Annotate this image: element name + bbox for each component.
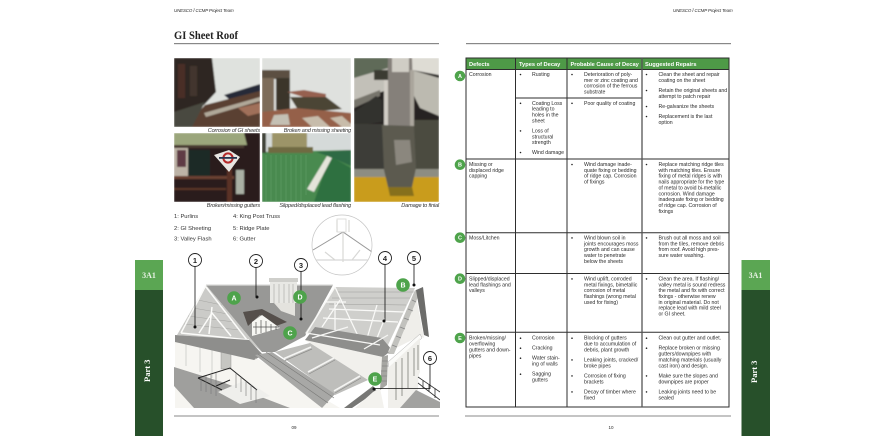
row C: moss/litchen: joints encourages moss bbox=[583, 241, 639, 247]
left side tab: Part 3 bbox=[142, 360, 152, 382]
legend: 5: Ridge Plate bbox=[233, 226, 269, 232]
row C: moss/litchen: Brush out all moss and soil bbox=[658, 235, 720, 241]
door bbox=[221, 352, 231, 369]
row D: slipped/displaced lead flashings: the metal and fix with correct bbox=[658, 288, 725, 294]
numbered callouts: 4 bbox=[383, 254, 388, 263]
table grid bbox=[466, 58, 729, 407]
marker: D: D bbox=[297, 294, 303, 302]
row D: slipped/displaced lead flashings: replace lead with mild steel bbox=[658, 306, 721, 312]
row D: slipped/displaced lead flashings bbox=[469, 276, 726, 318]
left page number: 09 bbox=[291, 425, 297, 430]
row E: broken gutters and downpipes: sealed bbox=[658, 395, 674, 401]
caption: slipped/displaced lead flashing: Slipped/displaced lead flashing bbox=[279, 203, 352, 209]
gable end wall bbox=[388, 300, 424, 397]
row B: missing or displaced ridge capping: corrosion. Wind damage bbox=[658, 191, 715, 197]
defects table bbox=[455, 58, 729, 407]
row D: slipped/displaced lead flashings: valleys bbox=[469, 288, 485, 294]
row D: slipped/displaced lead flashings: or GI sheet. bbox=[658, 312, 686, 318]
legend: 2: GI Sheeting bbox=[174, 226, 211, 232]
row marker: D: D bbox=[458, 277, 462, 283]
row B: missing or displaced ridge capping: inadequate fixing or bedding bbox=[658, 197, 724, 203]
photo: broken/missing gutters bbox=[174, 133, 260, 202]
photo: slipped/displaced lead flashing bbox=[262, 133, 351, 202]
legend: 3: Valley Flash bbox=[174, 236, 212, 242]
roof illustration bbox=[174, 264, 440, 408]
marker: D bbox=[293, 290, 307, 304]
row A: corrosion bbox=[469, 72, 727, 156]
right page header: UNESCO Î CCMP Project Team bbox=[673, 8, 733, 13]
row C: moss/litchen: water to penetrate bbox=[584, 253, 626, 259]
row E: broken gutters and downpipes: fixed bbox=[584, 395, 595, 401]
row E: broken gutters and downpipes: gutters/downpipes with bbox=[658, 352, 711, 358]
row C: moss/litchen: Moss/Litchen bbox=[469, 235, 500, 241]
right title rule bbox=[466, 43, 731, 44]
row E: broken gutters and downpipes: cast iron) and design. bbox=[658, 363, 708, 369]
row B: missing or displaced ridge capping: of metal to avoid bi-metallic bbox=[658, 185, 722, 191]
row A: corrosion: Deterioration of poly- bbox=[584, 72, 632, 78]
row E: broken gutters and downpipes: debris, plant growth bbox=[584, 347, 629, 353]
row B: missing or displaced ridge capping: nails appropriate for the type bbox=[658, 180, 724, 186]
icon: station sign bbox=[214, 150, 240, 172]
row marker: D bbox=[455, 273, 465, 284]
row E: broken gutters and downpipes: broke pipes bbox=[584, 363, 611, 369]
row E: broken gutters and downpipes: gutters and down- bbox=[469, 347, 511, 353]
row C: moss/litchen: below the sheets bbox=[584, 259, 623, 265]
row C: moss/litchen bbox=[469, 235, 724, 265]
marker: C: C bbox=[287, 330, 293, 338]
left wall bbox=[175, 340, 340, 408]
row A: corrosion: Retain the original sheets and bbox=[658, 88, 727, 94]
row D: slipped/displaced lead flashings: used for fixing) bbox=[584, 300, 618, 306]
title: GI Sheet Roof bbox=[174, 28, 239, 42]
caption: corrosion of GI sheets: Corrosion of GI sheets bbox=[208, 128, 260, 134]
row D: slipped/displaced lead flashings: fixings - otherwise renew bbox=[658, 294, 716, 300]
left eave band bbox=[175, 335, 263, 360]
row E: broken gutters and downpipes: downpipes are proper bbox=[658, 379, 709, 385]
marker: B bbox=[396, 278, 410, 292]
row marker: A bbox=[455, 71, 465, 81]
row E: broken gutters and downpipes: Decay of timber where bbox=[584, 389, 636, 395]
row A: corrosion: structural bbox=[532, 134, 553, 140]
left page header: UNESCO Î CCMP Project Team bbox=[174, 8, 234, 13]
row E: broken gutters and downpipes: Replace broken or missing bbox=[658, 346, 720, 352]
row E: broken gutters and downpipes: matching materials (usually bbox=[658, 357, 722, 363]
main GI sheeting hip roof bbox=[206, 285, 333, 352]
row marker: C: C bbox=[458, 236, 462, 242]
row B: missing or displaced ridge capping: Replace matching ridge tiles bbox=[658, 162, 724, 168]
table header: Types of Decay bbox=[519, 62, 561, 68]
row D: slipped/displaced lead flashings: flashings (wrong metal bbox=[584, 294, 636, 300]
numbered callouts: 3 bbox=[299, 261, 303, 270]
marker: B: B bbox=[400, 282, 406, 290]
row C: moss/litchen: Wind blown soil in bbox=[584, 235, 626, 241]
lower left wall under valley bbox=[255, 358, 322, 408]
row A: corrosion: holes in the bbox=[532, 112, 559, 118]
leader lines bbox=[195, 264, 430, 388]
row D: slipped/displaced lead flashings: Clean the area. If flashing/ bbox=[658, 276, 719, 282]
row E: broken gutters and downpipes bbox=[469, 336, 722, 401]
row A: corrosion: sheet bbox=[532, 118, 545, 124]
row E: broken gutters and downpipes: Water stain- bbox=[532, 356, 560, 362]
row marker: C bbox=[455, 232, 465, 243]
railing right bbox=[418, 377, 440, 400]
row A: corrosion: Coating Loss bbox=[532, 101, 562, 107]
row E: broken gutters and downpipes: Cracking bbox=[532, 346, 553, 352]
row E: broken gutters and downpipes: Leaking joints, cracked/ bbox=[584, 357, 638, 363]
row B: missing or displaced ridge capping: fixings bbox=[658, 209, 674, 215]
table header: Probable Cause of Decay bbox=[570, 62, 640, 68]
row A: corrosion: Rusting bbox=[532, 72, 550, 78]
row E: broken gutters and downpipes: gutters bbox=[532, 378, 548, 384]
marker: E bbox=[368, 372, 382, 386]
detail circle: king post truss bbox=[312, 215, 372, 275]
numbered callouts: 2 bbox=[254, 257, 258, 266]
row A: corrosion: attempt to patch repair bbox=[658, 94, 711, 100]
row A: corrosion: Corrosion bbox=[469, 72, 492, 78]
row marker: B: B bbox=[458, 163, 462, 169]
wall behind central opening bbox=[305, 340, 383, 380]
gutter bbox=[344, 386, 377, 408]
row A: corrosion: option bbox=[658, 120, 673, 126]
row D: slipped/displaced lead flashings: metal fixings, bimetallic bbox=[584, 282, 638, 288]
row B: missing or displaced ridge capping: Wind damage inade- bbox=[584, 162, 632, 168]
marker: A bbox=[227, 291, 241, 305]
photo: corrosion of GI sheets bbox=[174, 58, 260, 127]
row A: corrosion: Poor quality of coating bbox=[584, 101, 635, 107]
left side tab: 3A1 bbox=[142, 271, 156, 280]
central panel bbox=[275, 343, 368, 395]
ridge highlight bbox=[206, 284, 333, 286]
wall beside gutter bbox=[355, 388, 384, 408]
table header: Defects bbox=[469, 62, 490, 68]
row C: moss/litchen: sure water washing. bbox=[658, 253, 705, 259]
marker: A: A bbox=[231, 296, 237, 302]
left footer rule bbox=[174, 416, 439, 417]
row C: moss/litchen: from roof. Avoid high pres- bbox=[658, 247, 720, 253]
caption: broken and missing sheeting: Broken and missing sheeting bbox=[284, 128, 352, 134]
row D: slipped/displaced lead flashings: Slipped/displaced bbox=[469, 276, 510, 282]
row A: corrosion: corrosion of the ferrous bbox=[584, 84, 638, 90]
right side tab: Part 3 bbox=[749, 361, 759, 383]
row E: broken gutters and downpipes: due to accumulation of bbox=[584, 342, 637, 348]
photo: broken and missing sheeting bbox=[262, 58, 351, 127]
numbered callouts bbox=[188, 252, 436, 364]
row E: broken gutters and downpipes: brackets bbox=[584, 379, 604, 385]
right page number: 10 bbox=[608, 425, 614, 430]
row E: broken gutters and downpipes: Sagging bbox=[532, 372, 551, 378]
left gable with open trusses bbox=[177, 285, 262, 352]
row D: slipped/displaced lead flashings: lead flashings and bbox=[469, 282, 511, 288]
row D: slipped/displaced lead flashings: Wind uplift, corroded bbox=[584, 276, 632, 282]
numbered callouts: 6 bbox=[428, 354, 432, 363]
row B: missing or displaced ridge capping bbox=[469, 162, 724, 215]
row marker: E bbox=[455, 333, 465, 343]
photo: damage to finial bbox=[354, 58, 439, 202]
row A: corrosion: Loss of bbox=[532, 128, 549, 134]
row B: missing or displaced ridge capping: of fixings bbox=[584, 180, 605, 186]
row E: broken gutters and downpipes: Make sure the slopes and bbox=[658, 373, 718, 379]
left side tab bbox=[135, 260, 163, 436]
right roof section with open trusses bbox=[305, 287, 415, 345]
row B: missing or displaced ridge capping: of ridge cap. Corrosion bbox=[584, 174, 637, 180]
row C: moss/litchen: growth and can cause bbox=[584, 247, 635, 253]
right side tab bbox=[742, 260, 770, 436]
row B: missing or displaced ridge capping: quate fixing or bedding bbox=[584, 168, 637, 174]
right floor band bbox=[305, 327, 392, 357]
row E: broken gutters and downpipes: ing of walls bbox=[532, 362, 558, 368]
row E: broken gutters and downpipes: Clean out gutter and outlet. bbox=[658, 336, 721, 342]
row D: slipped/displaced lead flashings: valley metal is sound redress bbox=[658, 282, 726, 288]
row B: missing or displaced ridge capping: of ridge cap. Corrosion of bbox=[658, 203, 717, 209]
left title rule bbox=[174, 43, 439, 44]
row marker: A: A bbox=[458, 74, 462, 80]
legend bbox=[174, 214, 280, 242]
row E: broken gutters and downpipes: Corrosion of fixing bbox=[584, 373, 626, 379]
ground plane bbox=[400, 390, 440, 408]
row B: missing or displaced ridge capping: displaced ridge bbox=[469, 168, 504, 174]
row D: slipped/displaced lead flashings: corrosion of metal bbox=[584, 288, 625, 294]
row A: corrosion: Wind damage bbox=[532, 150, 564, 156]
row A: corrosion: strength bbox=[532, 140, 551, 146]
table header bbox=[466, 58, 729, 70]
row A: corrosion: coating on the sheet bbox=[658, 78, 706, 84]
row D: slipped/displaced lead flashings: in original material. Do not bbox=[658, 300, 719, 306]
numbered callouts: 5 bbox=[412, 254, 416, 263]
terrace bbox=[174, 367, 290, 408]
caption: broken/missing gutters: Broken/missing gutters bbox=[207, 203, 260, 209]
row B: missing or displaced ridge capping: capping bbox=[469, 174, 487, 180]
table header: Suggested Repairs bbox=[645, 62, 697, 68]
row E: broken gutters and downpipes: overflowing bbox=[469, 342, 495, 348]
right footer rule bbox=[465, 416, 731, 417]
valley strip bbox=[255, 352, 335, 408]
dormer bbox=[243, 309, 287, 326]
row B: missing or displaced ridge capping: with matching tiles. Ensure bbox=[658, 168, 720, 174]
row E: broken gutters and downpipes: Blocking of gutters bbox=[584, 336, 627, 342]
row B: missing or displaced ridge capping: fixing of metal ridges is with bbox=[658, 174, 722, 180]
balcony railing bbox=[198, 368, 257, 403]
row A: corrosion: Clean the sheet and repair bbox=[658, 72, 720, 78]
row A: corrosion: Re-galvanize the sheets bbox=[658, 104, 715, 110]
row C: moss/litchen: from the tiles, remove debris bbox=[658, 241, 724, 247]
row E: broken gutters and downpipes: Corrosion bbox=[532, 336, 555, 342]
stone quoin wall bbox=[380, 355, 388, 390]
white strip posts on left wall bbox=[186, 342, 212, 378]
row marker: E: E bbox=[458, 336, 462, 342]
numbered callouts: 1 bbox=[193, 256, 197, 265]
row A: corrosion: Replacement is the last bbox=[658, 114, 712, 120]
marker: E: E bbox=[373, 376, 378, 384]
caption: damage to finial: Damage to finial bbox=[401, 203, 440, 209]
row E: broken gutters and downpipes: Leaking joints need to be bbox=[658, 389, 716, 395]
marker: C bbox=[283, 326, 297, 340]
row E: broken gutters and downpipes: Broken/missing/ bbox=[469, 336, 506, 342]
right side tab: 3A1 bbox=[749, 271, 762, 280]
row marker: B bbox=[455, 159, 465, 170]
row A: corrosion: substrate bbox=[584, 90, 605, 96]
row E: broken gutters and downpipes: pipes bbox=[469, 353, 482, 359]
chimney bbox=[270, 282, 297, 303]
row B: missing or displaced ridge capping: Missing or bbox=[469, 162, 493, 168]
legend: 4: King Post Truss bbox=[233, 214, 280, 220]
legend: 1: Purlins bbox=[174, 214, 198, 220]
row A: corrosion: mer or zinc coating and bbox=[584, 78, 638, 84]
row A: corrosion: leading to bbox=[532, 107, 555, 113]
legend: 6: Gutter bbox=[233, 236, 256, 242]
